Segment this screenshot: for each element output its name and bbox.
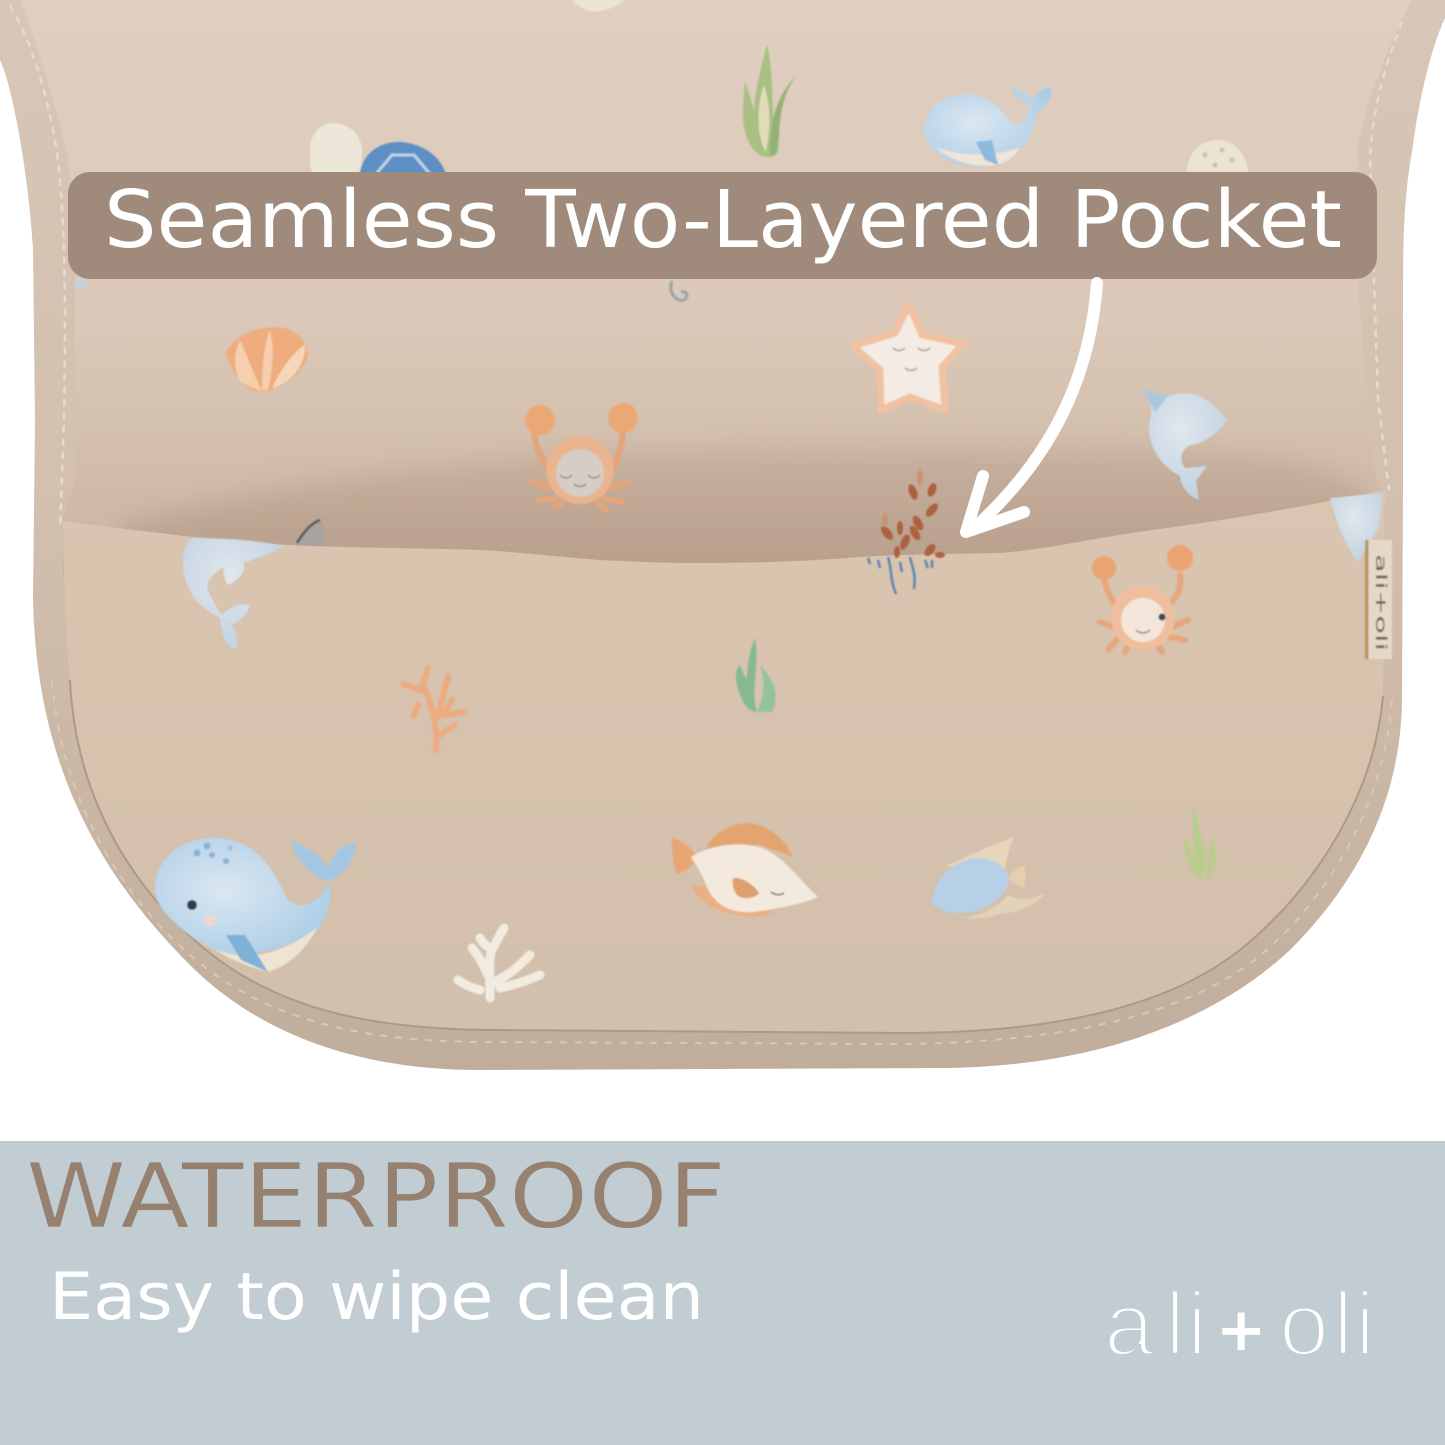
illustration: brand tag: ali+oli: [1372, 554, 1390, 651]
illustration: crab right: [1092, 545, 1193, 652]
illustration: dolphin right: [1143, 390, 1227, 500]
bib: [0, 0, 1445, 1070]
logo: ali: [1104, 1275, 1207, 1375]
illustration: starfish: [853, 305, 963, 410]
illustration: starfish remnant at top edge: [572, 0, 625, 11]
illustration: turtle shell: [360, 142, 446, 174]
stitching: neck trim right: [1370, 22, 1402, 490]
pocket inner shadow: [122, 446, 1366, 563]
stitching: lower trim: [52, 680, 1392, 1044]
pocket seam line: [70, 680, 1383, 1033]
illustration: green seaweed center: [736, 638, 776, 712]
illustration: flat fish: [672, 823, 818, 917]
illustration: red seaweed: [868, 470, 945, 594]
bib outer trim: [0, 0, 1445, 1070]
bottom panel: [0, 1141, 1445, 1445]
illustration: turtle head: [310, 123, 362, 174]
illustration: blue dot under title: [75, 277, 87, 289]
title text: Seamless Two-Layered Pocket: [104, 174, 1342, 266]
illustration: blue fish: [931, 837, 1046, 919]
arrow: [966, 283, 1097, 532]
upper panel behind pocket: [20, 0, 1412, 580]
illustration: top whale: [924, 87, 1051, 166]
pocket front: [63, 490, 1385, 1033]
illustration: seaweed right: [1184, 803, 1217, 880]
illustration: dolphin at pocket right edge: [1330, 493, 1383, 562]
illustration: dolphin left: [183, 520, 325, 650]
illustration: white coral: [458, 928, 540, 998]
illustration: large whale: [155, 838, 356, 972]
illustration: orange coral: [403, 668, 464, 750]
logo: [1104, 1275, 1375, 1375]
logo: +: [1216, 1295, 1266, 1365]
title bar: [68, 172, 1377, 279]
illustration: brand tag: [1365, 540, 1392, 659]
illustration: shell top right: [1187, 140, 1248, 172]
illustration: crab center: [525, 403, 638, 510]
illustration: seahorse remnant: [671, 281, 687, 300]
sea creature illustrations: [75, 0, 1392, 998]
stitching: neck trim left: [10, 5, 65, 530]
illustration: seaweed top: [743, 44, 797, 157]
heading: WATERPROOF: [26, 1144, 726, 1248]
logo: oli: [1279, 1275, 1375, 1375]
illustration: scallop shell: [226, 328, 307, 392]
subheading: Easy to wipe clean: [49, 1260, 704, 1335]
